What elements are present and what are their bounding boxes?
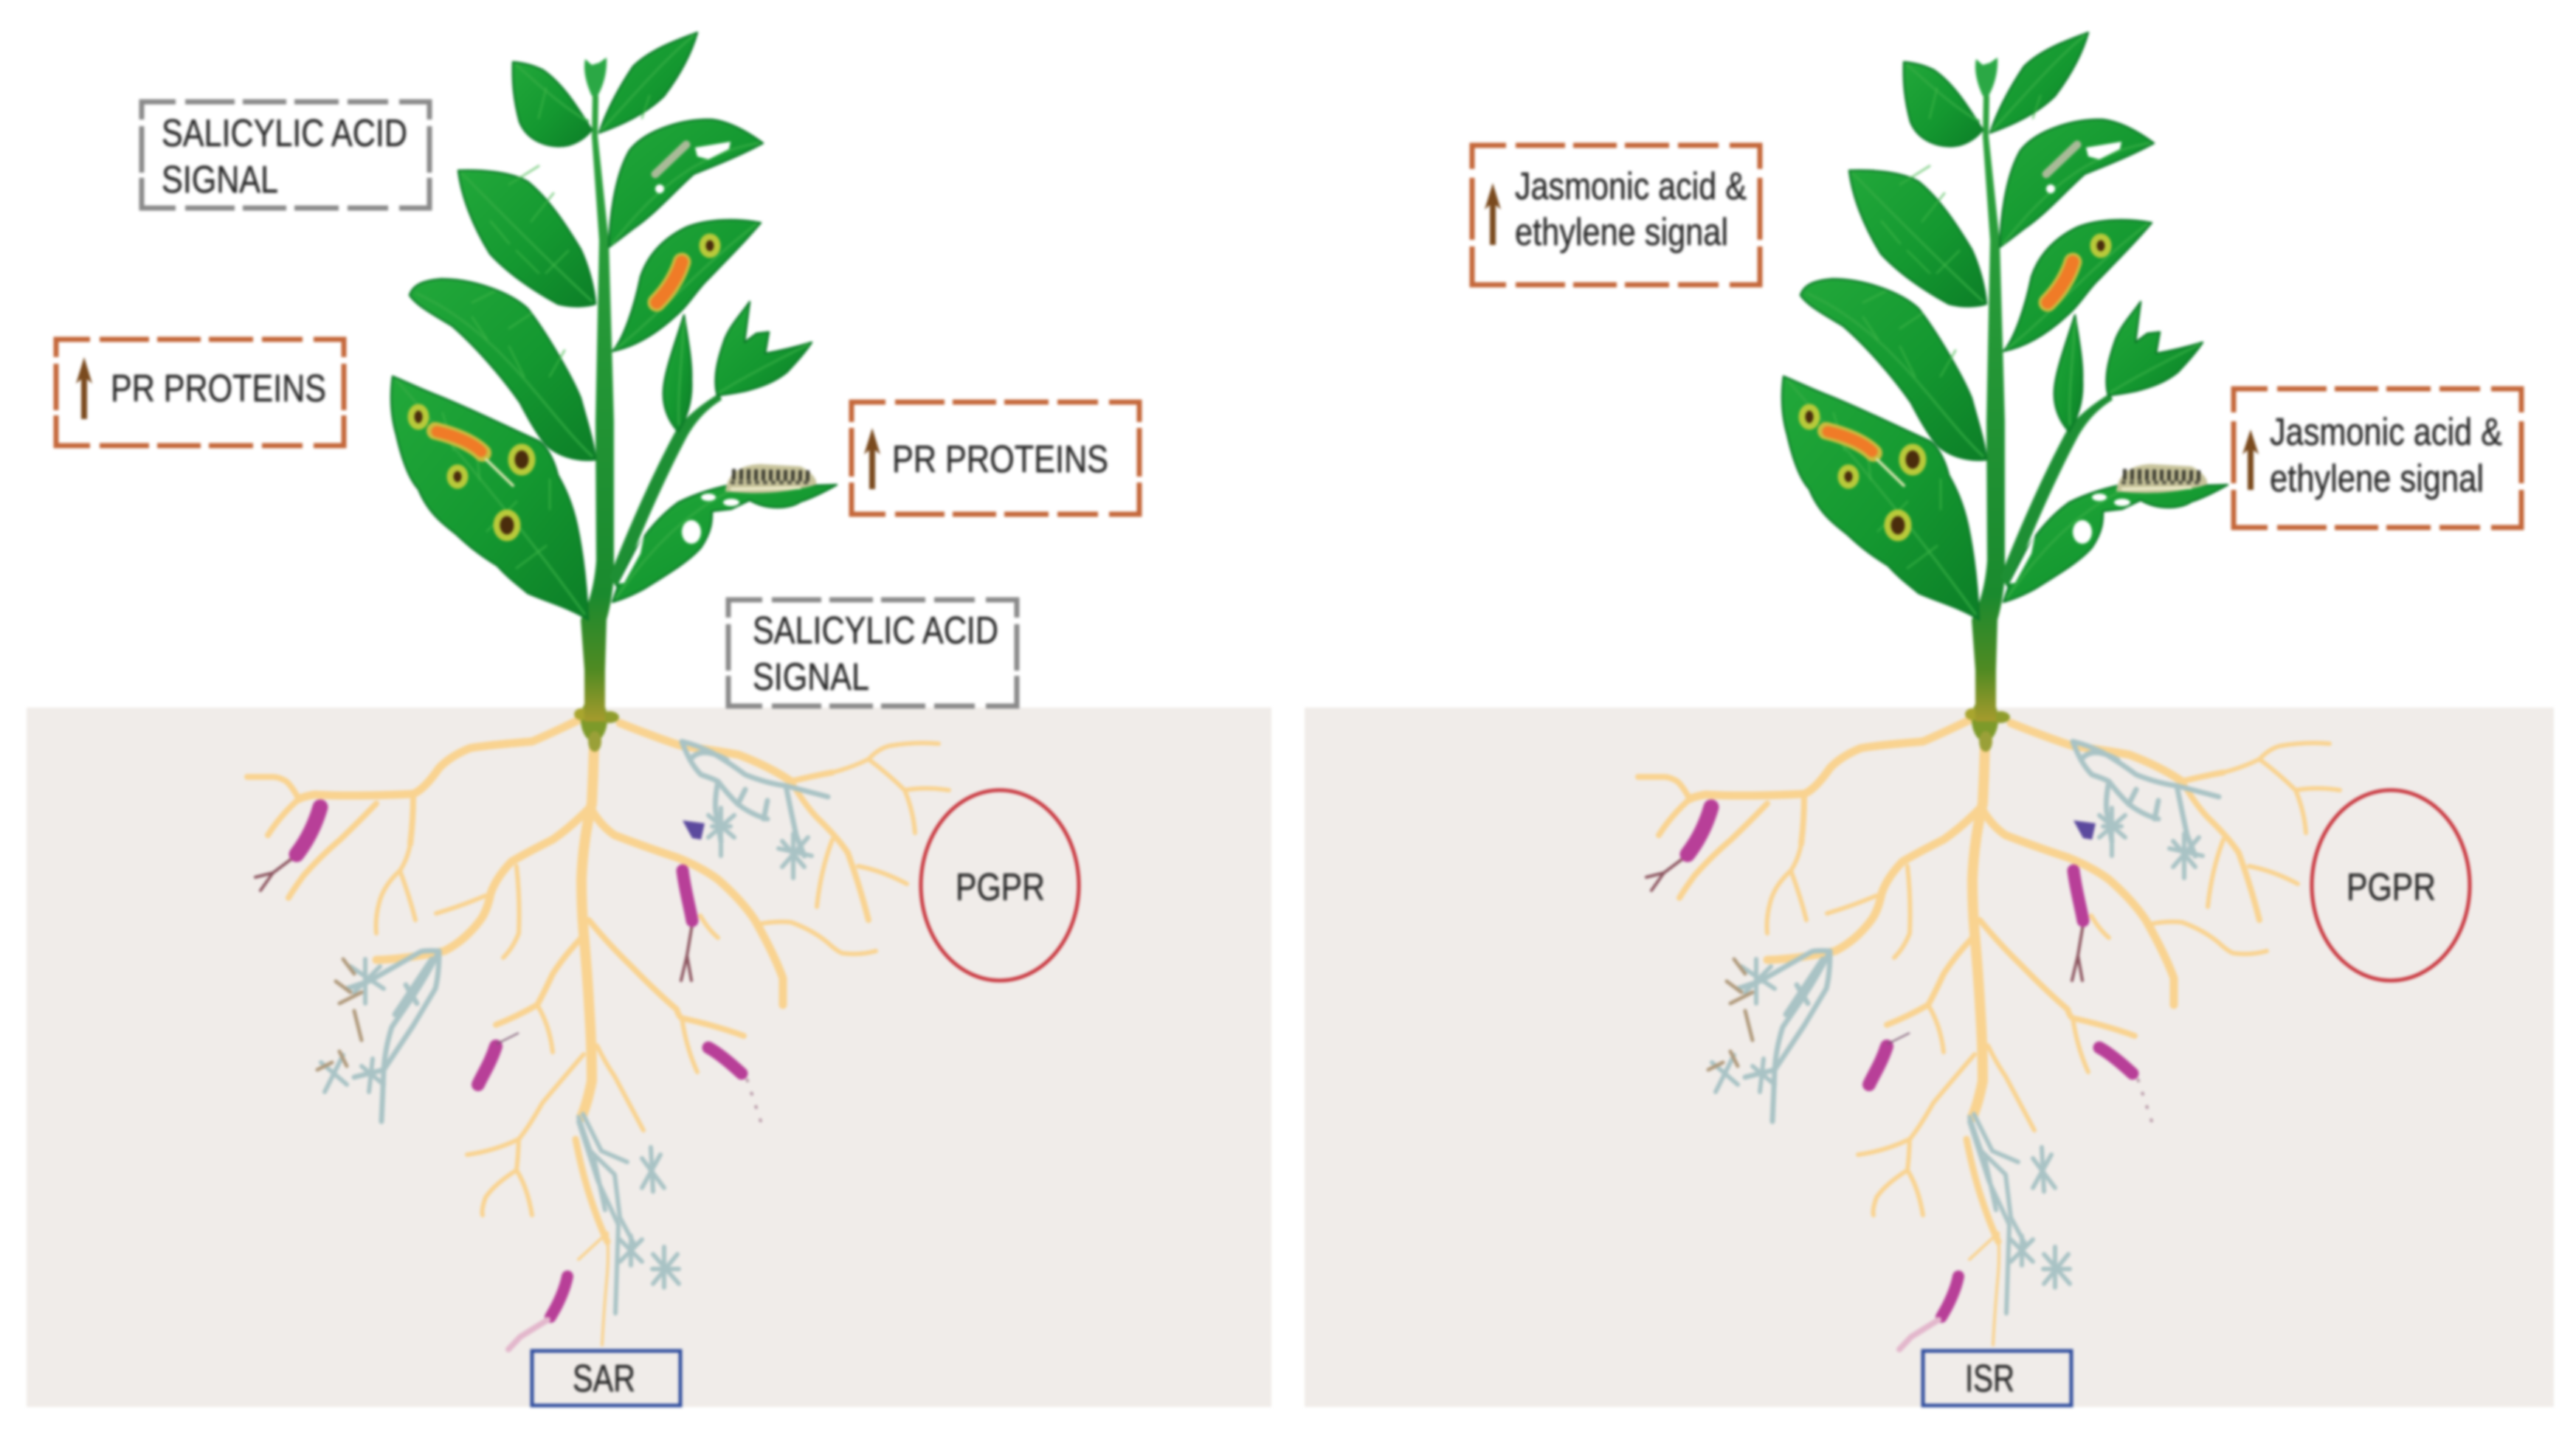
roots [247, 719, 949, 1345]
leaf: top left [513, 62, 592, 146]
label: ISR: ISR [1965, 1358, 2014, 1400]
leaf: left upper [458, 170, 595, 306]
plant illustration: ISR [1638, 32, 2340, 1349]
leaf: bottom left spotted [391, 376, 588, 620]
leaves [391, 32, 837, 620]
plant illustration: SAR [247, 32, 949, 1349]
leaf veins [397, 35, 808, 614]
label: SAR [532, 1351, 680, 1405]
callout: jasmonic acid and ethylene signal (top): ethylene signal [1515, 211, 1728, 254]
icon: up arrow [76, 357, 92, 419]
callout: jasmonic acid and ethylene signal (top) [1472, 145, 1760, 285]
callout: jasmonic acid and ethylene signal (right): Jasmonic acid & [2270, 411, 2502, 454]
branch stem [610, 393, 722, 590]
caterpillar [725, 464, 816, 493]
panel: ISR soil background [1305, 708, 2554, 1407]
root crown [574, 697, 619, 752]
leaf: left middle [410, 279, 595, 460]
leaf: narrow vertical [663, 315, 691, 432]
callout: salicylic acid signal (lower): SALICYLIC ACID [753, 609, 998, 652]
callout: PGPR (ISR) [2312, 790, 2470, 981]
callout: jasmonic acid and ethylene signal (right) [2234, 389, 2521, 528]
icon: up arrow [864, 428, 880, 489]
bud [584, 58, 607, 96]
stem [581, 96, 614, 722]
leaf: upper right damaged [609, 120, 763, 247]
label: SAR: SAR [573, 1358, 635, 1400]
leaf: eaten with caterpillar [612, 485, 837, 602]
label: ISR [1923, 1351, 2071, 1405]
callout: PR proteins (left): PR PROTEINS [111, 367, 326, 410]
callout: PGPR (ISR): PGPR [2347, 866, 2436, 909]
leaf: notched [716, 302, 812, 395]
caterpillar trail mark on leaf [655, 145, 686, 174]
callout: PR proteins (right) [852, 402, 1139, 514]
disease spots [411, 237, 717, 538]
callout: salicylic acid signal (top): SALICYLIC ACID [162, 112, 407, 155]
icon: up arrow [2242, 429, 2259, 490]
callout: salicylic acid signal (top): SIGNAL [162, 159, 278, 201]
callout: PGPR (SAR): PGPR [956, 866, 1045, 909]
bacteria [255, 807, 762, 1349]
mycorrhizal fungi [317, 741, 828, 1313]
leaf holes [618, 142, 739, 584]
callout: jasmonic acid and ethylene signal (top): Jasmonic acid & [1515, 165, 1747, 208]
callout: PR proteins (left) [56, 339, 344, 446]
leaf: mid right spotted [612, 220, 761, 351]
callout: salicylic acid signal (top) [142, 102, 429, 208]
callout: PGPR (SAR) [921, 790, 1079, 981]
callout: PR proteins (right): PR PROTEINS [892, 438, 1108, 481]
callout: salicylic acid signal (lower) [728, 600, 1017, 706]
callout: jasmonic acid and ethylene signal (right): ethylene signal [2270, 457, 2484, 500]
purple spore [683, 820, 705, 840]
panel: SAR soil background [27, 708, 1271, 1407]
leaf: top right [599, 32, 697, 133]
icon: up arrow [1485, 183, 1501, 245]
callout: salicylic acid signal (lower): SIGNAL [753, 656, 869, 699]
